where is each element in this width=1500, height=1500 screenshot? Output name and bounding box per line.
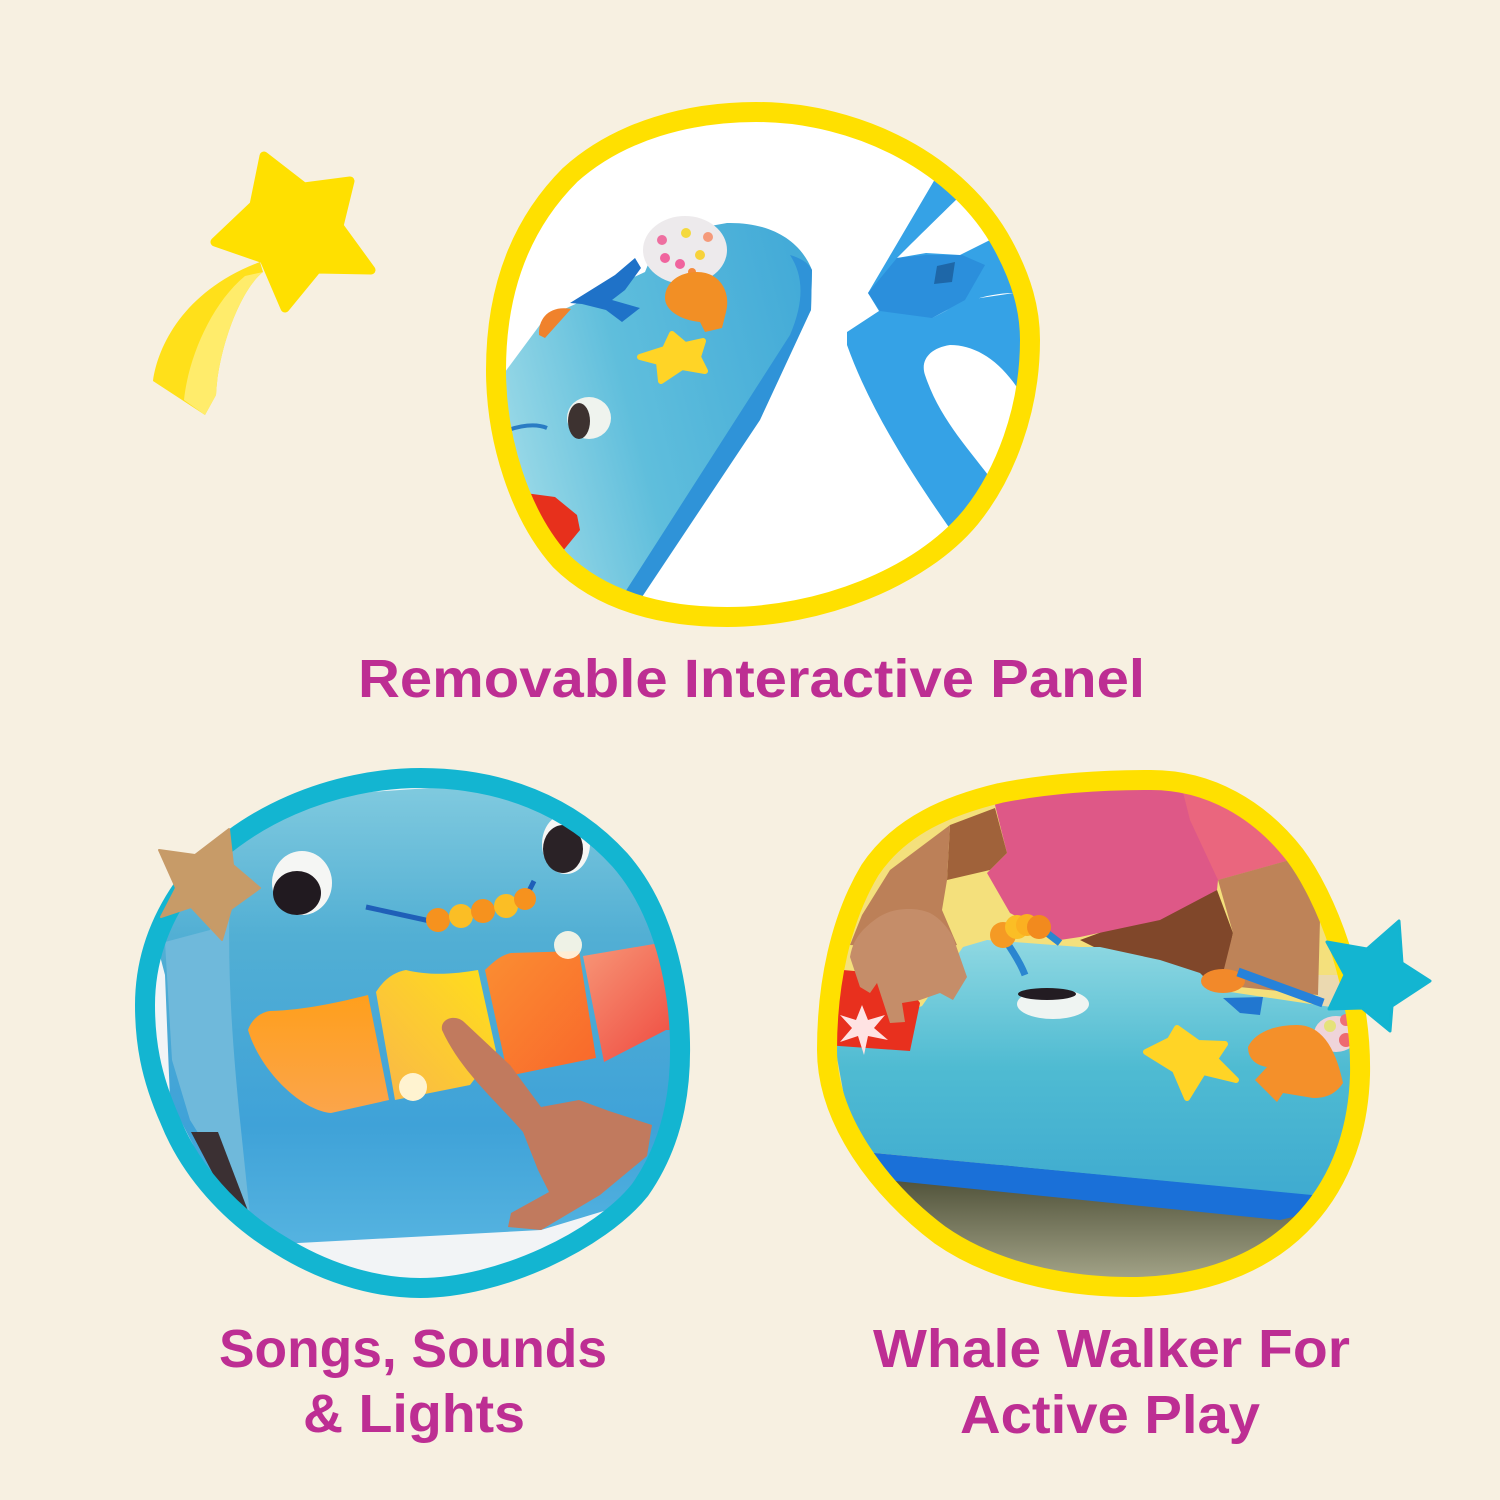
whale eye [567,397,611,439]
key: orange red [485,951,596,1076]
left eye [272,851,332,915]
yellow star button [1146,1028,1236,1098]
blue sea creatures [570,258,641,322]
side strip [165,919,250,1211]
icon: teal star [1327,921,1430,1031]
orange shell button [665,272,727,332]
heading: removable interactive panel: Removable Interactive Panel [358,649,1145,709]
mouth wire [508,425,547,430]
flash [840,1005,888,1055]
key: yellow [376,970,496,1100]
beads [426,888,536,932]
whale panel body [506,223,812,590]
pink rattle [1314,1014,1358,1052]
rattle dome [643,216,727,284]
heading: songs, sounds and lights [219,1319,607,1444]
key: orange [248,995,389,1113]
shirt sleeve [1184,794,1286,880]
red button [530,494,580,550]
heading: songs, sounds and lights: & Lights [303,1384,525,1444]
whale walker body [834,940,1365,1195]
blob border [827,780,1360,1287]
panel: removable interactive panel photo [480,100,1050,630]
beige wall corner [1318,975,1340,1007]
blue walker frame [847,180,1020,526]
torso shadow [1080,890,1233,985]
light flare top [554,931,582,959]
yellow star button [640,334,705,381]
back orange shape [1201,969,1245,993]
right arm [1218,858,1320,995]
blue long creature [1238,972,1323,1003]
panel: songs, sounds and lights photo [130,770,700,1300]
forearm [850,825,957,950]
icon: brown star [159,829,260,940]
heading: whale walker for active play: Active Play [960,1385,1260,1445]
beads [990,914,1060,975]
blob border [496,112,1030,617]
light flare bottom [399,1073,427,1101]
bead wire [366,881,534,921]
side orange button [539,308,571,338]
baby shirt [987,780,1297,940]
dark wheel [191,1132,248,1210]
walker clip block [868,255,985,318]
panel: whale walker photo [820,770,1380,1300]
floor [896,1165,1294,1277]
blue base band [874,1152,1312,1220]
heading: whale walker for active play: Whale Walker For [873,1319,1350,1379]
heading: whale walker for active play [873,1319,1350,1445]
right eye [542,814,590,874]
whale panel edge [620,255,812,600]
blob border [145,778,680,1288]
clip slot [934,262,955,284]
red button [825,970,920,1051]
hand [850,909,967,1023]
orange shell button [1248,1025,1343,1102]
key: red [583,944,670,1062]
finger and hand [442,1018,652,1230]
blue short creature [1223,997,1263,1015]
upper left arm [947,808,1007,880]
whale eye [1017,988,1089,1019]
icon: shooting star [153,156,371,415]
whale body [160,788,670,1244]
heading: songs, sounds and lights: Songs, Sounds [219,1319,607,1379]
